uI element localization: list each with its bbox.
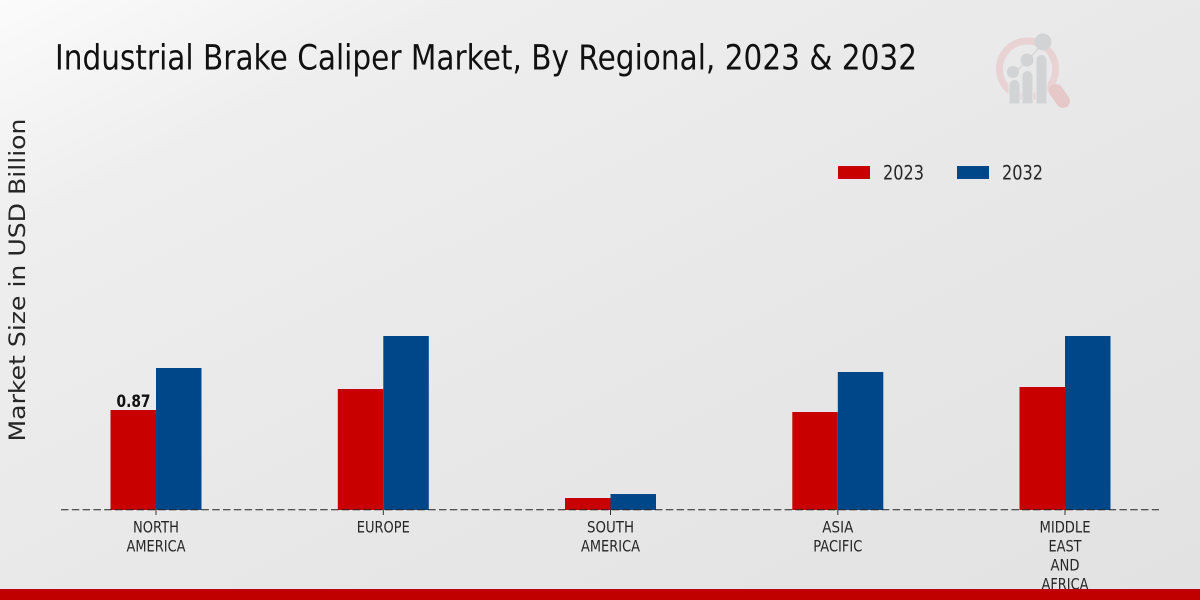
- North America bars: [110, 368, 202, 510]
- Asia Pacific bars: [792, 372, 883, 510]
- legend: [838, 162, 1043, 184]
- category label: Middle East and Africa: MIDDLE: [1040, 518, 1090, 536]
- legend item: 2032: 2032: [1002, 162, 1043, 184]
- category label: South America: SOUTH: [587, 518, 634, 536]
- legend item: 2023: [838, 162, 924, 184]
- title: Industrial Brake Caliper Market, By Regional, 2023 & 2032: [55, 38, 917, 78]
- bar chart: [61, 336, 1159, 515]
- legend item: 2032: [957, 162, 1043, 184]
- category label: Asia Pacific: PACIFIC: [813, 536, 862, 556]
- category label: Europe: EUROPE: [357, 518, 410, 536]
- x axis baseline: [61, 509, 1159, 511]
- data label: 0.87: 0.87: [116, 392, 150, 411]
- category label: Asia Pacific: ASIA: [822, 518, 853, 536]
- category label: North America: NORTH: [133, 518, 179, 536]
- y-axis label: Market Size in USD Billion: [5, 118, 31, 442]
- category label: North America: AMERICA: [126, 536, 186, 556]
- category label: Middle East and Africa: EAST: [1048, 536, 1082, 556]
- South America bars: [565, 494, 656, 510]
- legend item: 2023: 2023: [883, 162, 924, 184]
- bottom band: [0, 589, 1200, 600]
- category label: Middle East and Africa: AND: [1050, 556, 1080, 574]
- category label: Middle East and Africa: AFRICA: [1042, 574, 1089, 594]
- icon: watermark logo: [1000, 34, 1063, 104]
- Europe bars: [338, 336, 429, 510]
- Middle East and Africa bars: [1020, 336, 1110, 510]
- category label: South America: AMERICA: [581, 536, 640, 556]
